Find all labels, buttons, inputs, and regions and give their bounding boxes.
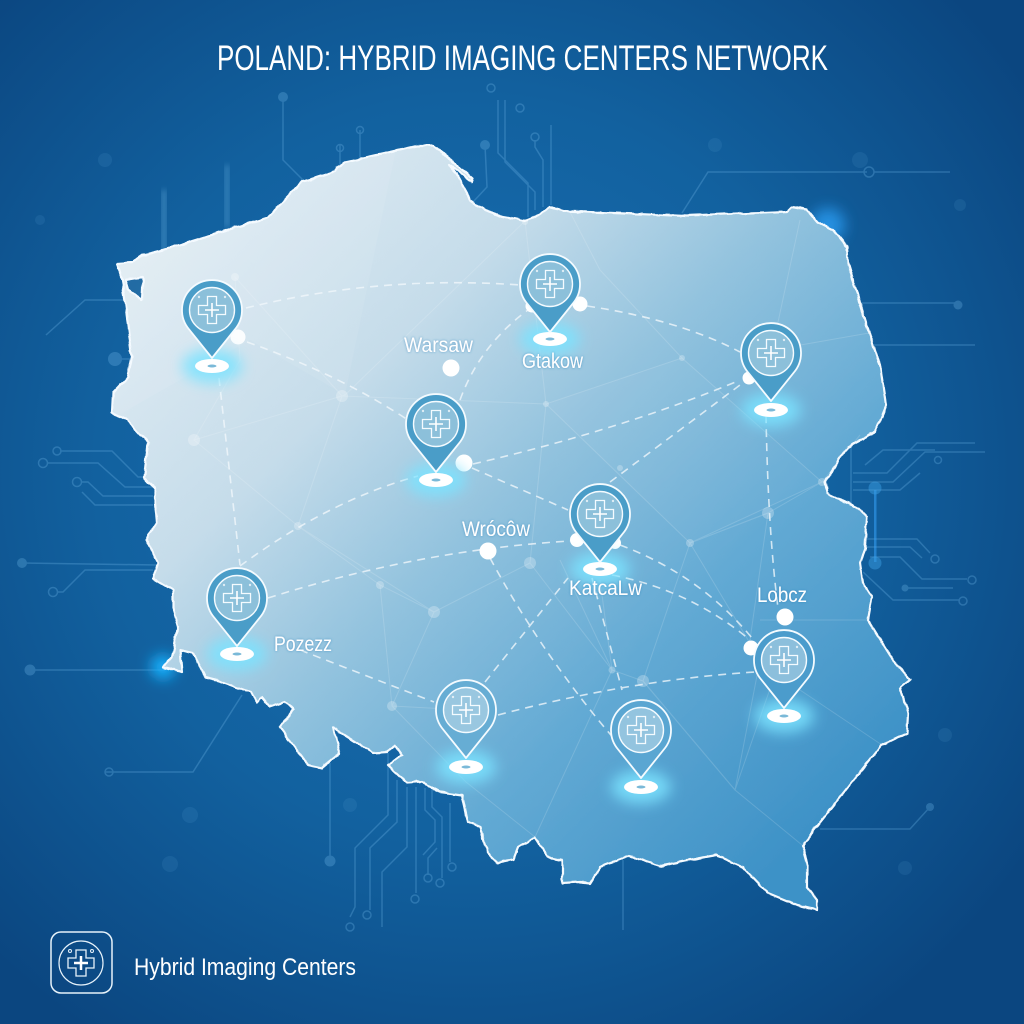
circuit traces <box>17 84 985 931</box>
label: KatcaLw: KatcaLw <box>569 577 643 600</box>
legend icon <box>51 932 112 993</box>
city labels <box>274 334 807 656</box>
legend <box>51 932 356 993</box>
pin: south-east centre <box>754 630 814 733</box>
pin: south centre <box>611 700 671 804</box>
legend label: Hybrid Imaging Centers <box>134 954 356 981</box>
label: Wrócôw: Wrócôw <box>462 518 531 541</box>
pin: north-east centre <box>741 323 801 427</box>
white network nodes <box>230 296 794 656</box>
pin: north centre <box>520 254 580 356</box>
pin: south-west centre <box>436 680 496 784</box>
pin: west centre <box>207 568 267 671</box>
traces: right side <box>820 300 985 829</box>
vertical light streaks <box>162 165 882 570</box>
label: Gtakow: Gtakow <box>522 350 584 373</box>
traces: top <box>278 84 950 217</box>
traces: left side <box>17 300 242 776</box>
faint background dots <box>35 138 966 875</box>
pin: north-west centre <box>182 280 242 383</box>
land shape <box>112 146 910 910</box>
mesh lines <box>194 212 886 845</box>
pin: central-west centre <box>406 394 466 497</box>
label: Warsaw: Warsaw <box>404 334 474 357</box>
corner glows <box>151 208 845 679</box>
dashed network links <box>219 283 778 748</box>
traces: bottom <box>324 753 623 931</box>
pin: central centre <box>570 484 630 586</box>
faint nodes <box>188 219 826 711</box>
label: Lobcz: Lobcz <box>757 584 807 607</box>
title: POLAND: HYBRID IMAGING CENTERS NETWORK <box>217 39 828 78</box>
map of Poland <box>100 130 910 910</box>
label: Pozezz: Pozezz <box>274 633 332 656</box>
facets <box>100 130 822 543</box>
